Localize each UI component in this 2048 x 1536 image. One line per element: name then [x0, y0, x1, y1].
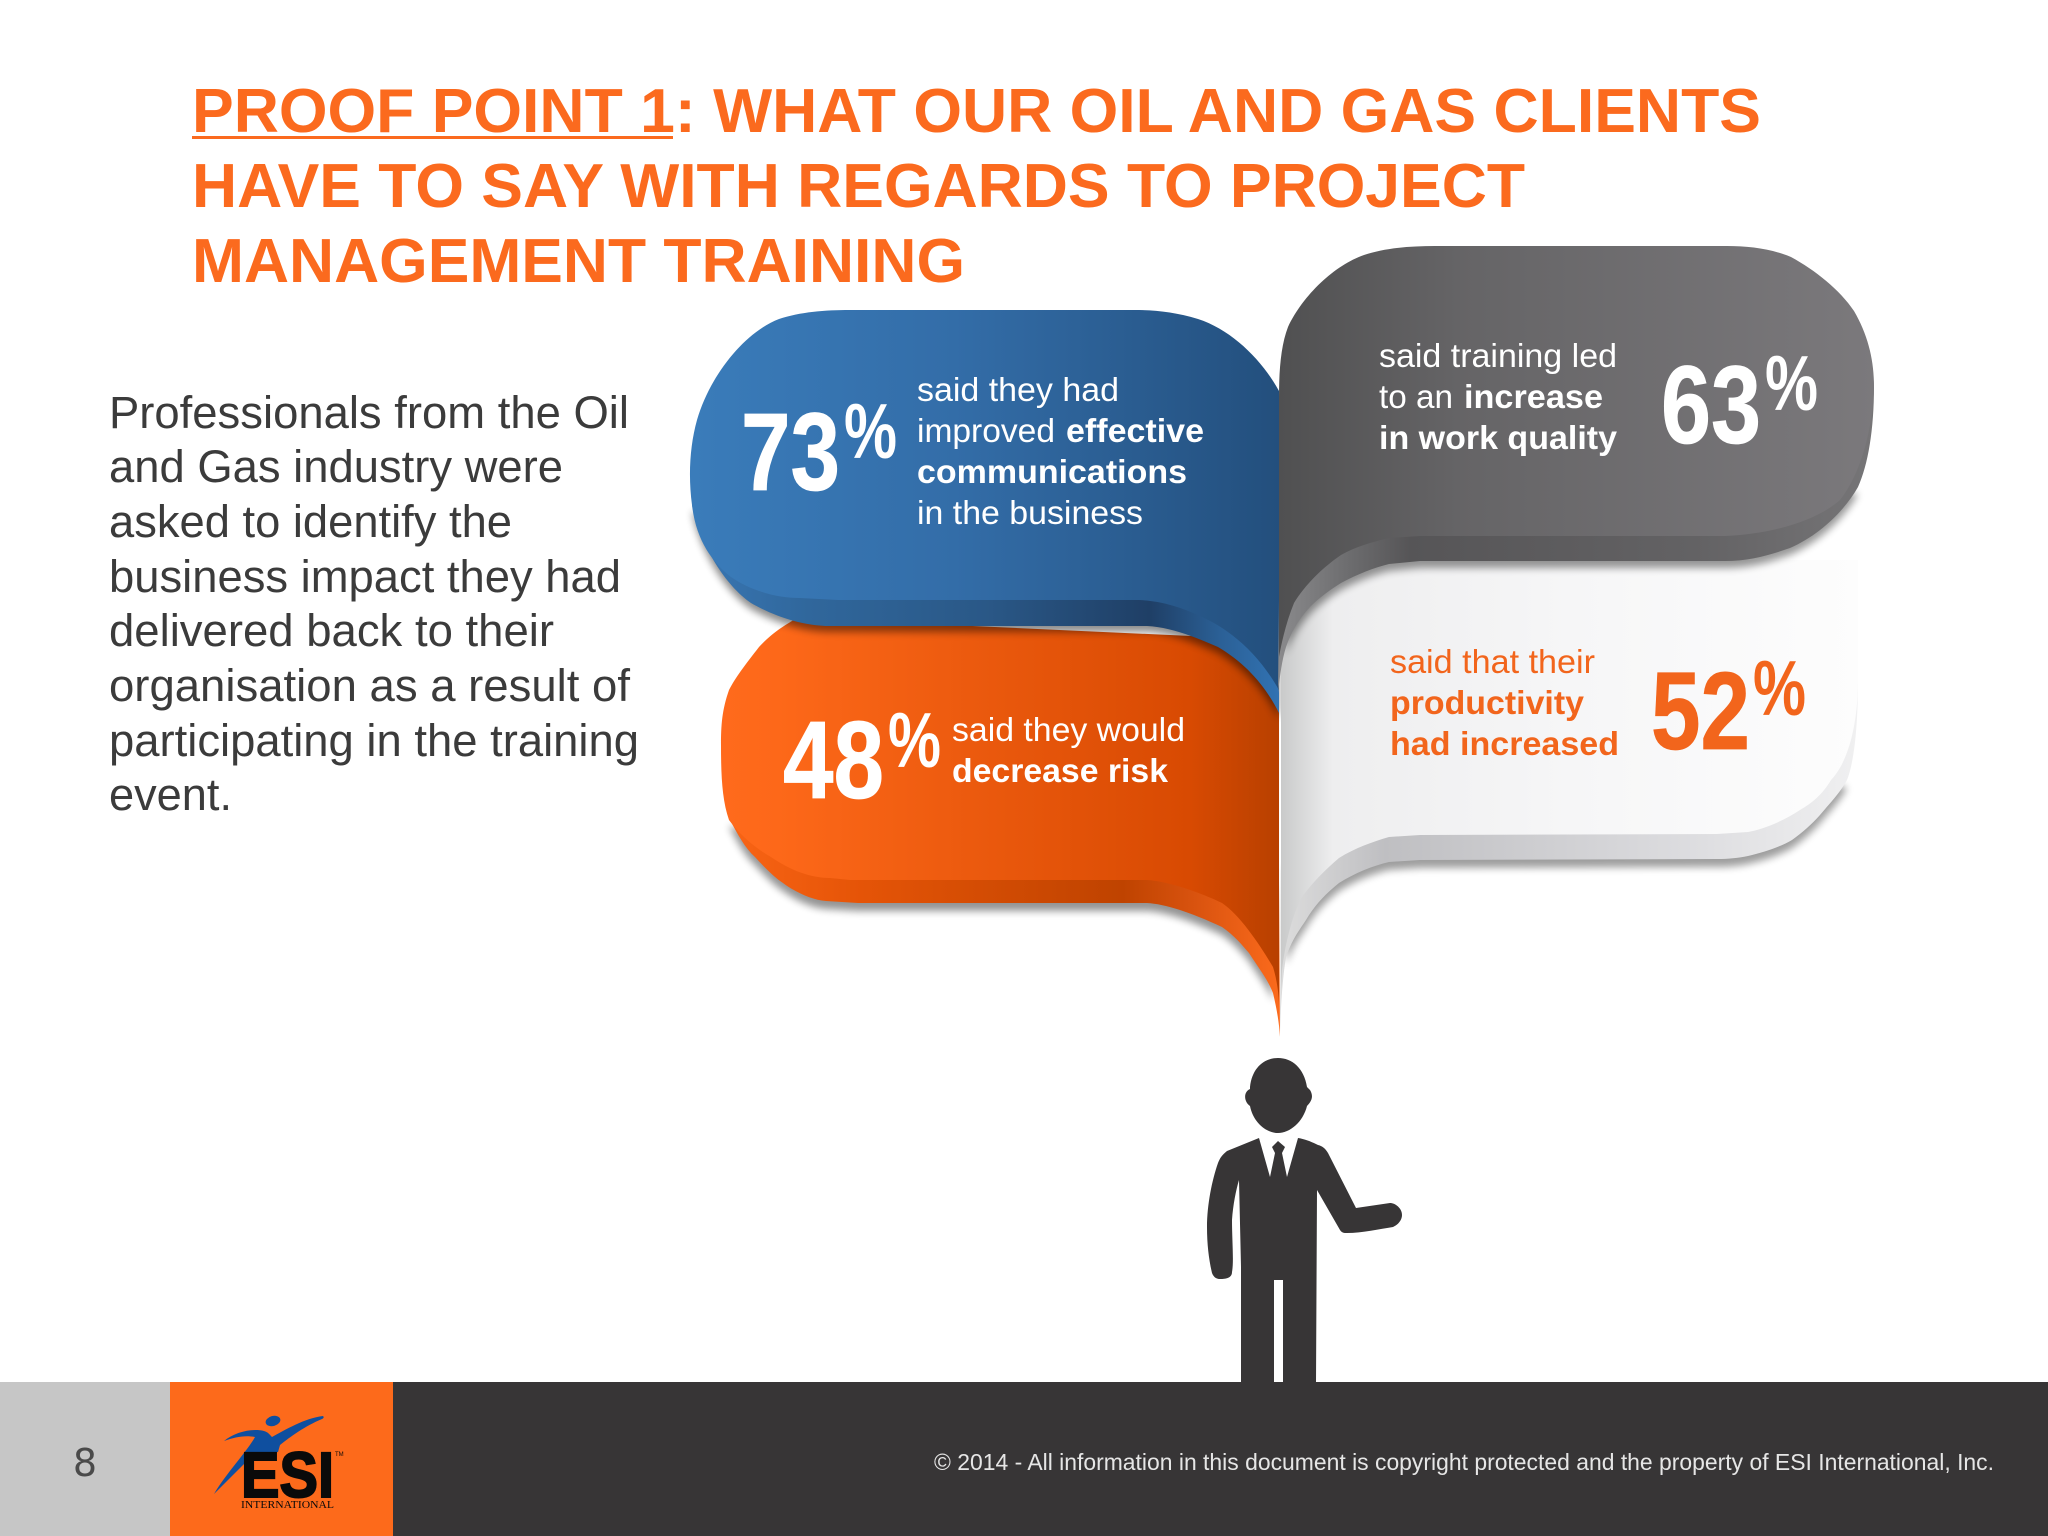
- footer: copyright bar: © 2014 - All information in this document is copyright protected and the property of ESI International, Inc.: [934, 1449, 1994, 1475]
- label: effective communications: communications: [917, 453, 1187, 490]
- label: effective communications: said they had: [917, 371, 1119, 408]
- label: work quality: to an: [1379, 378, 1453, 415]
- intro text block: Professionals from the Oil: [109, 387, 629, 438]
- label: decrease risk: said they would: [952, 711, 1185, 748]
- icon: blue running figure: [214, 1414, 324, 1494]
- stat: 73%: %: [844, 387, 897, 475]
- label: effective communications: in the business: [917, 494, 1143, 531]
- label: work quality: increase: [1464, 378, 1603, 415]
- label: work quality: in work quality: [1379, 419, 1618, 456]
- intro text block: and Gas industry were: [109, 441, 563, 492]
- label: productivity: had increased: [1390, 725, 1619, 762]
- title: [192, 77, 1761, 296]
- intro text block: participating in the training: [109, 715, 639, 766]
- panel: 63% work quality: [1278, 246, 1874, 693]
- panel: 73% effective communications: [690, 310, 1279, 719]
- title: MANAGEMENT TRAINING: [192, 227, 965, 296]
- title: PROOF POINT 1: WHAT OUR OIL AND GAS CLIENTS: [192, 77, 1761, 146]
- intro text block: event.: [109, 769, 232, 820]
- footer: copyright bar: [393, 1382, 2048, 1536]
- label: decrease risk: decrease risk: [952, 752, 1169, 789]
- label: productivity: [1390, 643, 1619, 762]
- title: HAVE TO SAY WITH REGARDS TO PROJECT: [192, 152, 1525, 221]
- logo wordmark: INTERNATIONAL: [241, 1500, 334, 1511]
- intro text block: organisation as a result of: [109, 660, 630, 711]
- footer: ESI logo panel: [170, 1382, 393, 1536]
- label: decrease risk: [952, 711, 1185, 789]
- label: productivity: said that their: [1390, 643, 1595, 680]
- intro text block: [109, 387, 639, 820]
- panel: 52% productivity: [1280, 560, 1858, 1033]
- footer: page number panel: [0, 1382, 170, 1536]
- label: work quality: said training led: [1379, 337, 1617, 374]
- label: effective communications: improved: [917, 412, 1055, 449]
- logo wordmark: ESI: [241, 1439, 334, 1511]
- intro text block: delivered back to their: [109, 605, 554, 656]
- stat: 52%: %: [1753, 644, 1806, 732]
- footer: page number panel: 8: [73, 1441, 97, 1485]
- stat: 48%: %: [888, 696, 941, 784]
- label: effective communications: [917, 371, 1204, 531]
- stat: 73%: 73: [741, 391, 840, 514]
- stat: 52%: 52: [1651, 650, 1750, 773]
- stat: 48%: 48: [783, 699, 884, 822]
- icon: businessman silhouette: [1207, 1058, 1402, 1383]
- label: work quality: [1379, 337, 1618, 456]
- label: productivity: productivity: [1390, 684, 1585, 721]
- stat: 63%: 63: [1661, 344, 1761, 467]
- label: effective communications: effective: [1066, 412, 1204, 449]
- panel: 48% decrease risk: [721, 618, 1280, 1037]
- logo wordmark: TM: [335, 1452, 344, 1458]
- stat: 63%: %: [1765, 339, 1818, 427]
- intro text block: asked to identify the: [109, 496, 512, 547]
- intro text block: business impact they had: [109, 551, 621, 602]
